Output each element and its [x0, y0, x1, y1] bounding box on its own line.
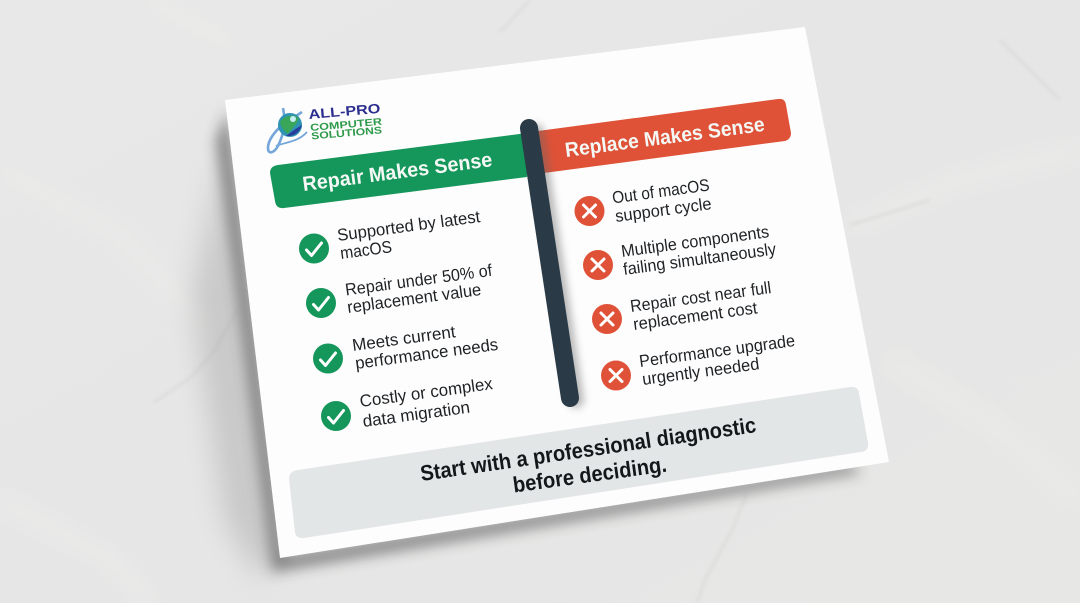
logo wordmark: COMPUTER	[310, 117, 383, 134]
replace heading: Replace Makes Sense	[564, 113, 766, 162]
replace item 2: failing simultaneously	[622, 239, 778, 279]
repair item 2	[306, 261, 493, 318]
footer callout: Start with a professional diagnostic	[419, 412, 758, 486]
footer callout: before deciding.	[511, 452, 668, 497]
repair heading: Repair Makes Sense	[301, 148, 494, 196]
repair item 1: Supported by latest	[336, 207, 482, 245]
replace item 3	[592, 278, 772, 334]
repair item 2: Repair under 50% of	[344, 261, 493, 299]
replace item 4	[601, 331, 796, 390]
replace item 4: urgently needed	[641, 354, 760, 389]
repair item 1: macOS	[339, 237, 393, 263]
repair heading	[270, 133, 527, 208]
replace heading	[538, 99, 791, 173]
replace item 2: Multiple components	[620, 222, 770, 261]
replace item 3: Repair cost near full	[629, 278, 772, 316]
logo icon: globe with swoosh	[268, 108, 307, 152]
replace item 2	[583, 222, 778, 280]
repair item 1	[299, 207, 482, 264]
replace item 3: replacement cost	[632, 298, 759, 334]
repair item 4	[321, 374, 494, 431]
footer callout	[289, 387, 868, 538]
repair item 3	[313, 322, 499, 374]
card shadow	[192, 110, 862, 578]
replace item 4: Performance upgrade	[638, 331, 796, 371]
panel: repair	[270, 133, 527, 431]
replace item 1: support cycle	[614, 194, 713, 226]
logo	[268, 101, 383, 152]
logo wordmark	[308, 101, 383, 142]
card	[225, 27, 889, 558]
replace item 1: Out of macOS	[611, 176, 711, 207]
center divider	[529, 128, 576, 400]
logo wordmark: ALL-PRO	[308, 101, 381, 122]
repair item 4: Costly or complex	[358, 374, 494, 411]
replace item 1	[574, 176, 713, 226]
repair item 4: data migration	[361, 398, 471, 431]
logo wordmark: SOLUTIONS	[311, 125, 383, 142]
repair item 3: Meets current	[351, 322, 457, 355]
panel: replace	[538, 99, 796, 390]
repair item 2: replacement value	[346, 280, 482, 317]
repair item 3: performance needs	[354, 335, 499, 373]
